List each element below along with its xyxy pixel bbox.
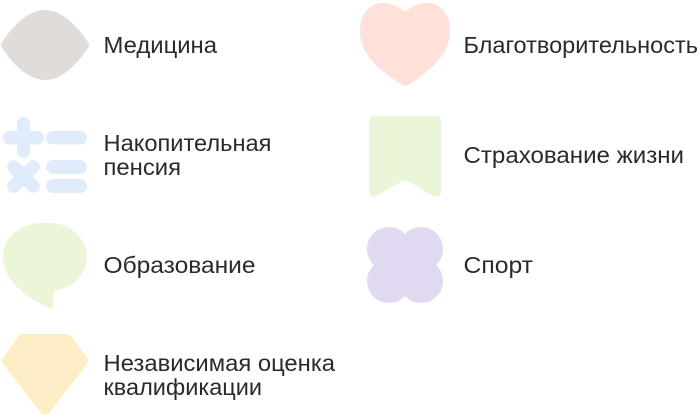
label: qualification: Независимая оценка — [104, 350, 335, 376]
icon: charity heart — [360, 3, 450, 86]
label: pension: Накопительная — [104, 130, 272, 156]
label: pension: пенсия — [104, 154, 181, 180]
icon: calculator symbols — [3, 117, 87, 196]
label: qualification — [104, 350, 335, 400]
icon: qualification diamond — [2, 334, 88, 415]
label: pension — [104, 130, 272, 180]
label: sport: Спорт — [464, 252, 533, 278]
icon: education speech bubble — [3, 223, 87, 308]
label: medicine: Медицина — [104, 32, 217, 58]
label: life insurance: Страхование жизни — [464, 142, 684, 168]
icon: life insurance bookmark — [369, 116, 441, 197]
label: charity: Благотворительность — [464, 32, 698, 58]
label: education: Образование — [104, 252, 256, 278]
icon: medicine leaf — [1, 10, 89, 80]
icon: sport clover — [367, 227, 443, 303]
label: qualification: квалификации — [104, 374, 262, 400]
